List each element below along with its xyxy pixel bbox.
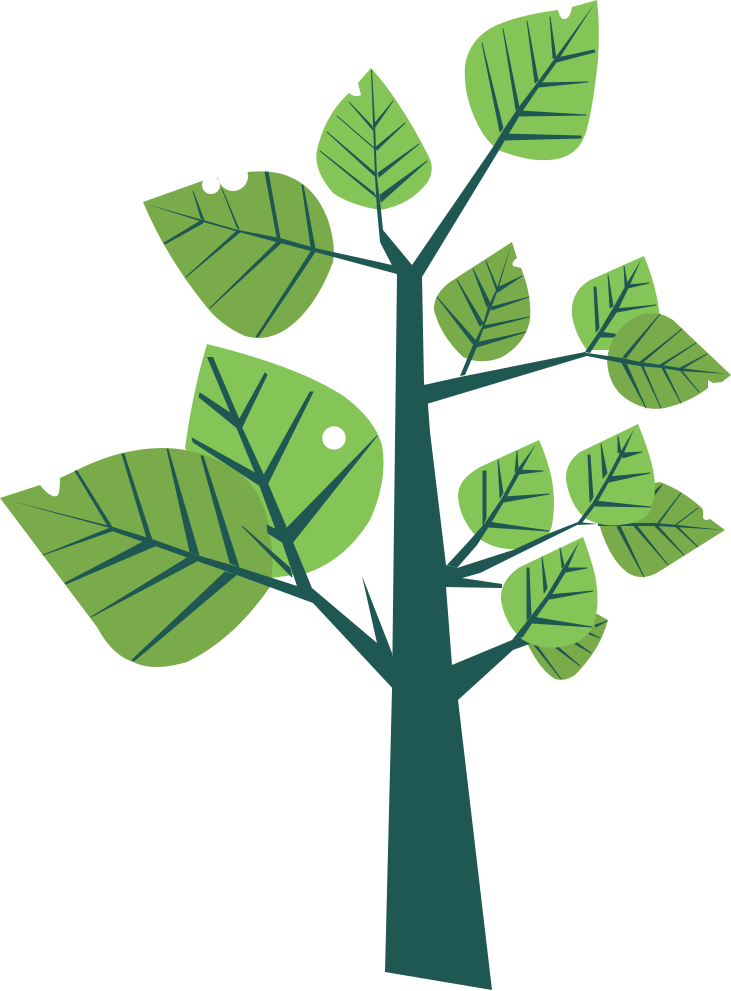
leaf: bottom small dark leaf [527,610,608,680]
leaf: middle right dark leaf [434,242,530,376]
leaf: far right dark leaf [587,313,731,409]
leaf: right light leaf over back leaf [566,424,655,525]
upper right branch [424,352,590,405]
leaf: bottom light leaf [501,537,598,648]
middle right branch [446,522,598,588]
leaf: upper right light leaf [572,256,660,353]
lower left branch with leaf veins [7,357,396,692]
leaf: top right light leaf [465,0,599,160]
leaf: large light left leaf [185,344,384,578]
lower right branch [440,635,535,700]
leaf: lower right dark back leaf [598,482,725,577]
leaf: centre right light leaf [447,440,554,568]
leaf: large dark left leaf [0,448,272,667]
trunk with upper branches [371,3,595,990]
leaf: upper left dark leaf [143,161,397,338]
leaf: top centre light leaf [316,68,432,210]
